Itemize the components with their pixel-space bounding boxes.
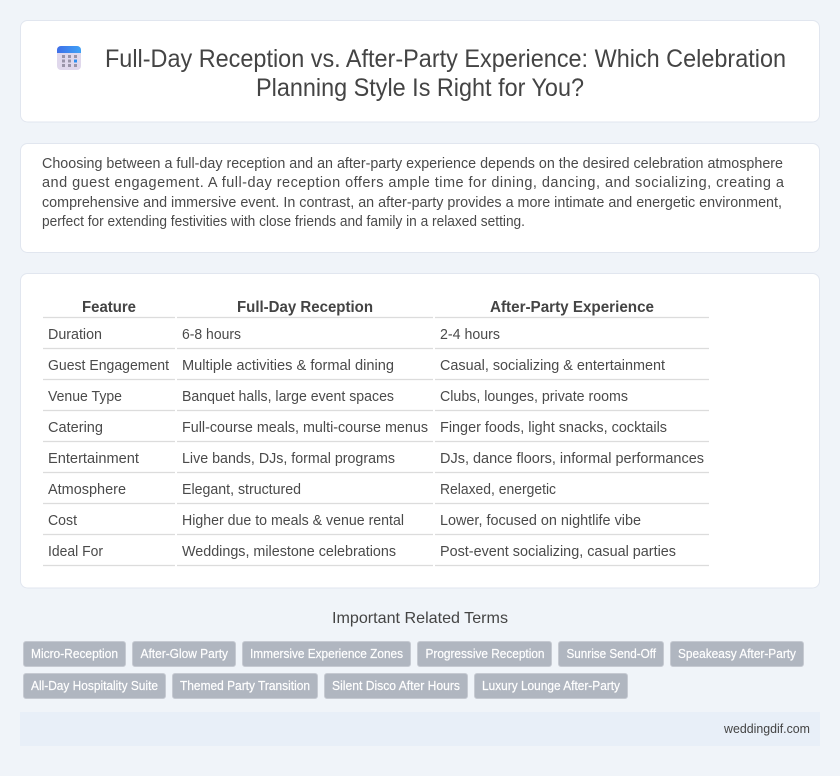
row: Ideal For: Ideal For	[48, 544, 103, 560]
title: Planning Style Is Right for You?	[256, 74, 584, 102]
row: Ideal For: Weddings, milestone celebrations	[182, 544, 396, 560]
row: Catering	[48, 420, 667, 436]
row: Guest Engagement: Multiple activities & formal dining	[182, 358, 394, 374]
intro paragraph: and guest engagement. A full-day reception offers ample time for dining, dancing, and socializing, creating a	[42, 175, 785, 191]
intro paragraph: comprehensive and immersive event. In contrast, an after-party provides a more intimate and energetic environment,	[42, 195, 782, 211]
row: Venue Type: Banquet halls, large event spaces	[182, 389, 394, 405]
row: Venue Type	[48, 389, 628, 405]
row: Atmosphere: Atmosphere	[48, 482, 126, 498]
footer: weddingdif.com	[723, 722, 810, 736]
title: Full-Day Reception vs. After-Party Experience: Which Celebration	[105, 45, 786, 73]
row: Cost: Lower, focused on nightlife vibe	[440, 513, 641, 529]
tag	[24, 674, 166, 698]
tag: Immersive Experience Zones	[250, 647, 403, 661]
tag	[132, 642, 236, 666]
row: Cost	[48, 513, 641, 529]
tag: Silent Disco After Hours	[332, 679, 460, 693]
tag	[24, 642, 126, 666]
row: Catering: Full-course meals, multi-course menus	[182, 420, 428, 436]
row: Cost: Cost	[48, 513, 77, 529]
row: Duration: 6-8 hours	[182, 327, 241, 343]
row: Venue Type: Venue Type	[48, 389, 122, 405]
row: Catering: Catering	[48, 420, 103, 436]
tag	[172, 674, 318, 698]
tag: After-Glow Party	[140, 647, 229, 661]
row: Atmosphere: Relaxed, energetic	[440, 482, 556, 498]
tag	[418, 642, 552, 666]
row: Guest Engagement	[48, 358, 665, 374]
row: Entertainment: DJs, dance floors, informal performances	[440, 451, 704, 467]
heading: related terms: Important Related Terms	[332, 610, 508, 627]
row: Guest Engagement: Casual, socializing & entertainment	[440, 358, 665, 374]
intro paragraph: perfect for extending festivities with close friends and family in a relaxed setting.	[42, 214, 525, 230]
tag	[474, 674, 628, 698]
row: Catering: Finger foods, light snacks, cocktails	[440, 420, 667, 436]
tags: related terms	[24, 642, 804, 698]
table header: Full-Day Reception	[237, 299, 373, 316]
title	[105, 45, 786, 102]
tag	[670, 642, 804, 666]
footer	[20, 712, 820, 746]
panel: comparison table	[20, 274, 820, 588]
row: Entertainment: Entertainment	[48, 451, 139, 467]
icon: calendar	[57, 46, 81, 70]
row: Atmosphere	[48, 482, 556, 498]
row: Entertainment: Live bands, DJs, formal programs	[182, 451, 395, 467]
tag: Micro-Reception	[31, 647, 118, 661]
intro paragraph	[42, 156, 785, 230]
table header: After-Party Experience	[490, 299, 654, 316]
row: Atmosphere: Elegant, structured	[182, 482, 301, 498]
row: Entertainment	[48, 451, 704, 467]
tag: Sunrise Send-Off	[566, 647, 656, 661]
tag: All-Day Hospitality Suite	[31, 679, 158, 693]
tag: Luxury Lounge After-Party	[482, 679, 621, 693]
panel: title header	[20, 20, 820, 122]
row: Ideal For: Post-event socializing, casual parties	[440, 544, 676, 560]
table header: Feature	[82, 299, 136, 316]
table header	[82, 299, 654, 316]
tag: Speakeasy After-Party	[678, 647, 797, 661]
row: Duration	[48, 327, 500, 343]
row: Guest Engagement: Guest Engagement	[48, 358, 169, 374]
row: Duration: 2-4 hours	[440, 327, 500, 343]
row: Duration: Duration	[48, 327, 102, 343]
row: Venue Type: Clubs, lounges, private rooms	[440, 389, 628, 405]
tag: Progressive Reception	[426, 647, 545, 661]
tag	[242, 642, 410, 666]
row: Cost: Higher due to meals & venue rental	[182, 513, 404, 529]
tag: Themed Party Transition	[180, 679, 310, 693]
tag	[324, 674, 468, 698]
intro paragraph: Choosing between a full-day reception and an after-party experience depends on the desired celebration atmosphere	[42, 156, 783, 172]
panel: introduction	[20, 144, 820, 252]
row: Ideal For	[48, 544, 676, 560]
tag	[558, 642, 664, 666]
